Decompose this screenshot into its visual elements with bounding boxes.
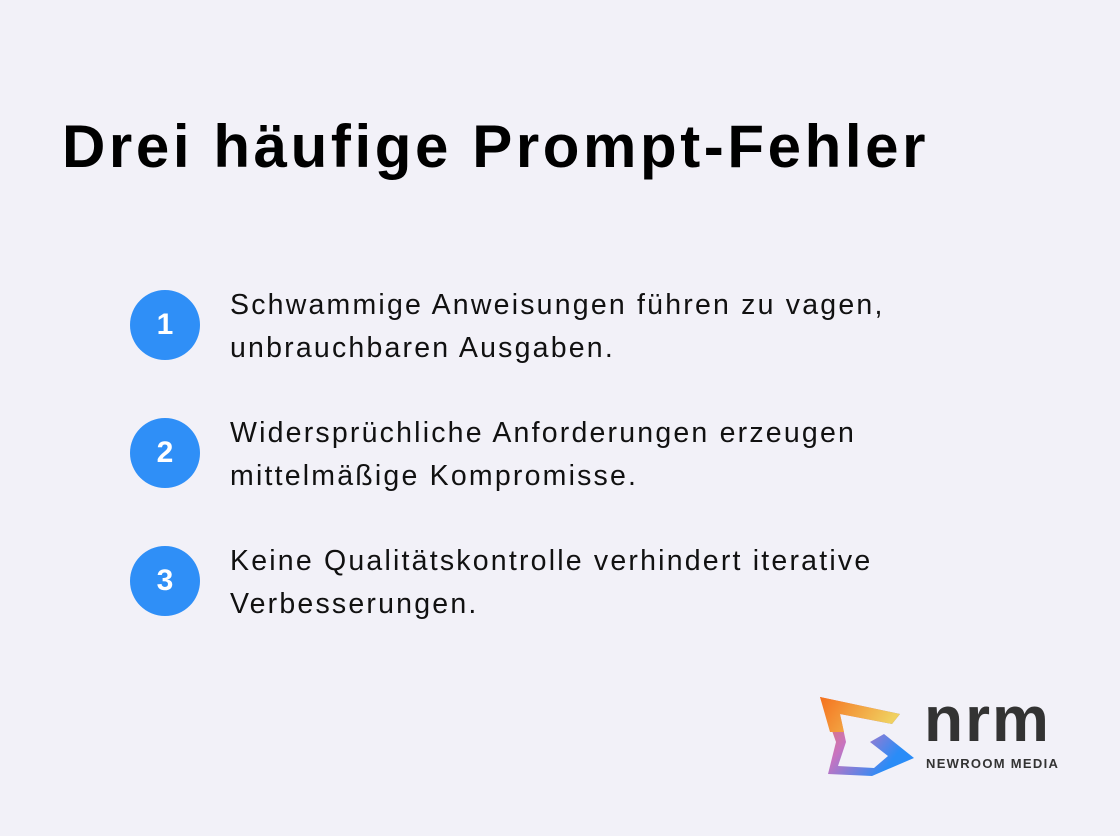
text 1: unbrauchbaren Ausgaben. — [230, 332, 615, 364]
logo subtitle: NEWROOM MEDIA — [926, 756, 1059, 771]
text 3: Keine Qualitätskontrolle verhindert iterative — [230, 545, 872, 577]
item 3 — [130, 545, 872, 620]
badge 3 — [130, 546, 200, 616]
text 1 — [230, 289, 885, 364]
text 3 — [230, 545, 872, 620]
text 2: Widersprüchliche Anforderungen erzeugen — [230, 417, 856, 449]
badge 2: 2 — [157, 436, 173, 469]
logo icon — [820, 697, 914, 776]
text 1: Schwammige Anweisungen führen zu vagen, — [230, 289, 885, 321]
title: Drei häufige Prompt-Fehler — [62, 113, 929, 180]
text 2: mittelmäßige Kompromisse. — [230, 460, 638, 492]
badge 1: 1 — [157, 308, 173, 341]
logo — [820, 683, 1059, 776]
badge 3: 3 — [157, 564, 173, 597]
item 1 — [130, 289, 885, 364]
logo wordmark: nrm — [924, 683, 1051, 755]
item 2 — [130, 417, 856, 492]
badge 1 — [130, 290, 200, 360]
text 3: Verbesserungen. — [230, 588, 478, 620]
badge 2 — [130, 418, 200, 488]
text 2 — [230, 417, 856, 492]
